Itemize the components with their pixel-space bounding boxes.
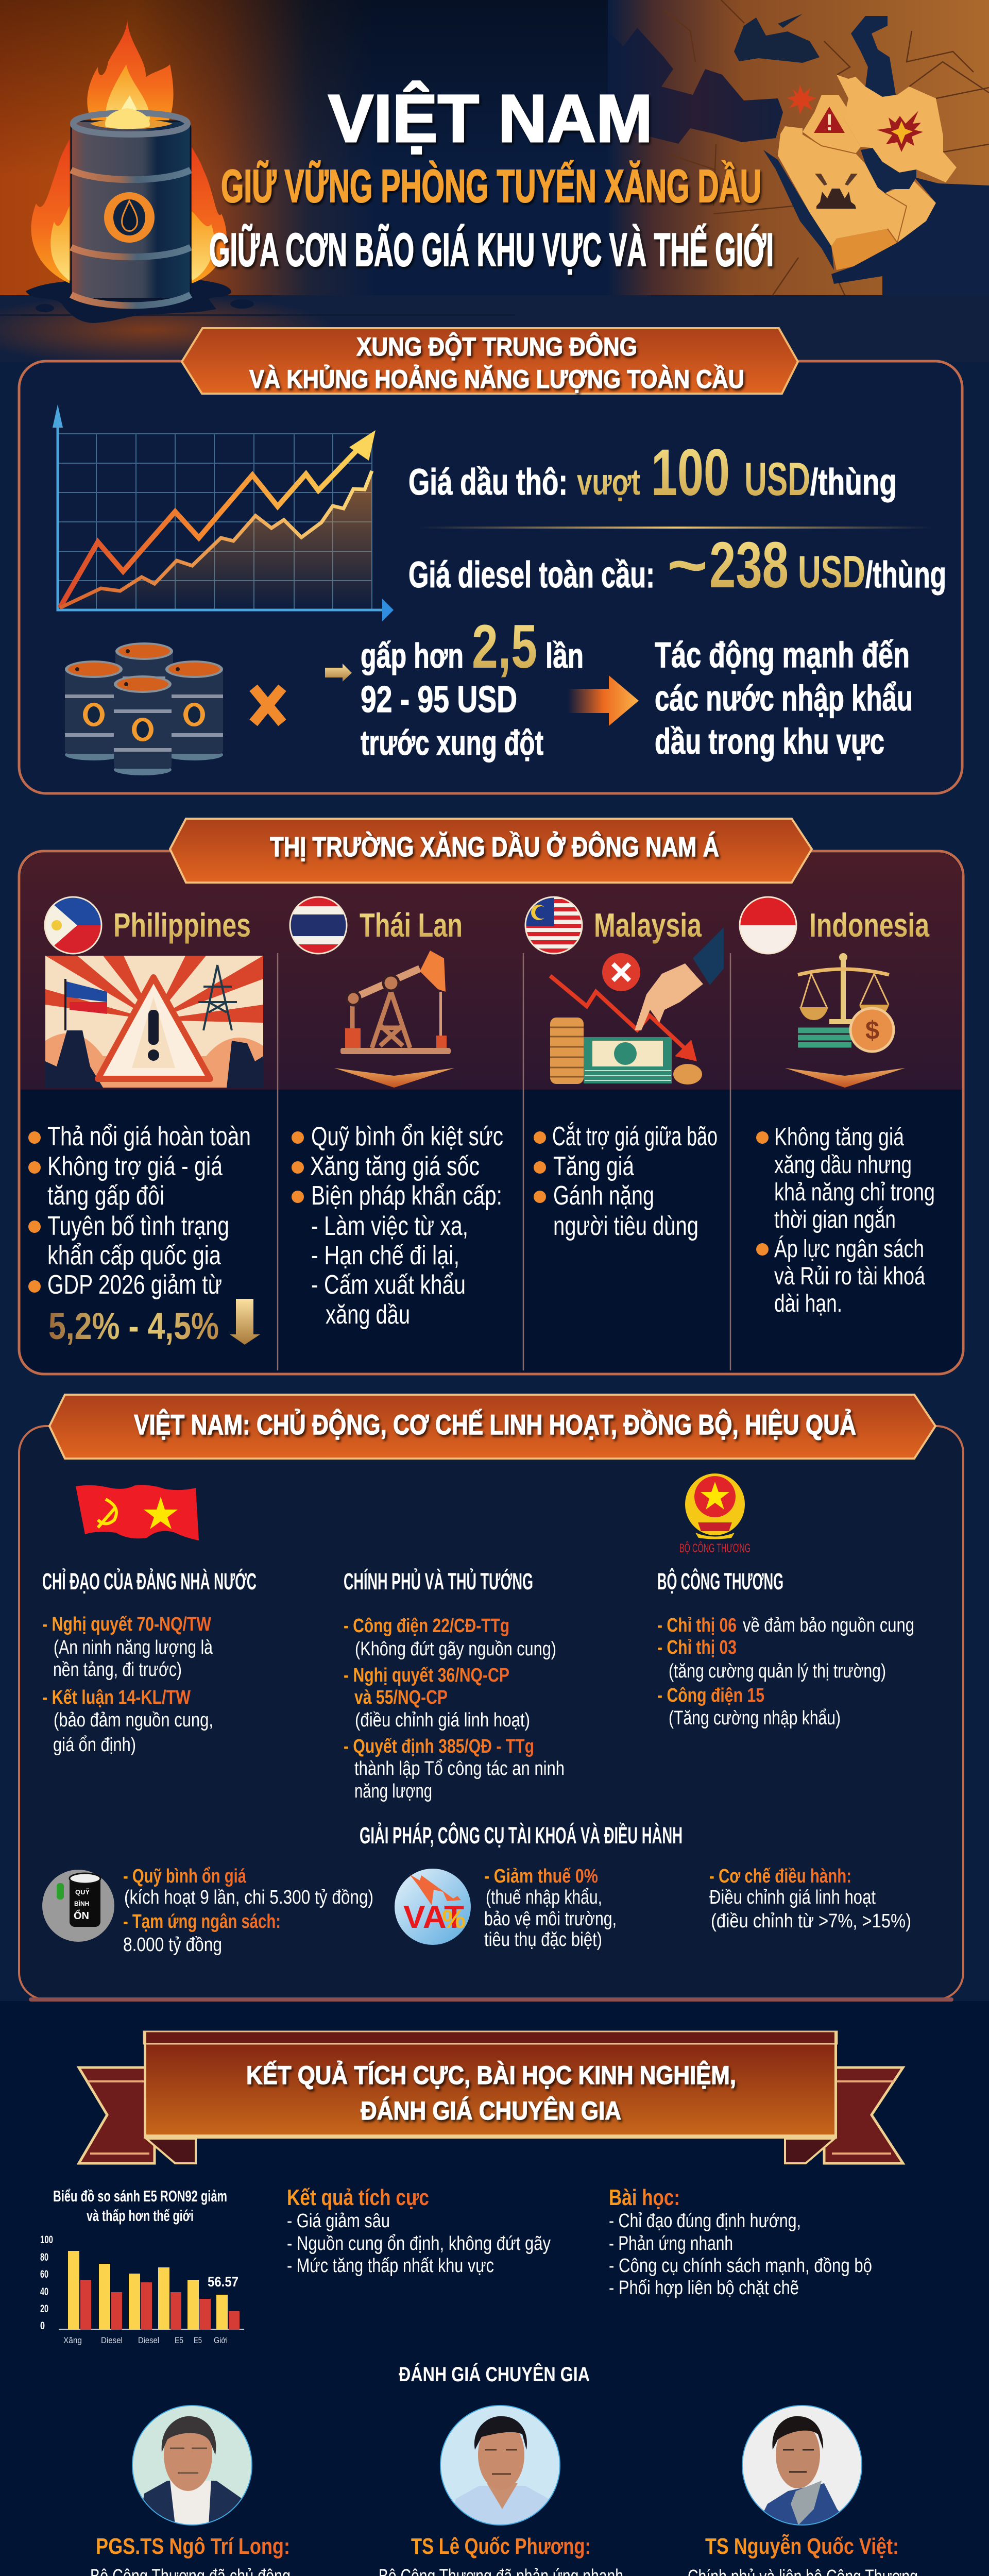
column: party direction: (bảo đảm nguồn cung, [54, 1709, 213, 1731]
bullet list: Thailand [292, 1122, 503, 1330]
column: Philippines [28, 897, 263, 1347]
text block: positive results: Kết quả tích cực [287, 2185, 429, 2210]
bullet list: Philippines: Thả nổi giá hoàn toàn [47, 1122, 251, 1151]
icon: burning oil barrel [26, 20, 254, 323]
bars [68, 2251, 240, 2330]
column: government: thành lập Tổ công tác an ninh [354, 1758, 565, 1780]
flag: Philippines [45, 897, 101, 954]
y axis labels: 20 [40, 2303, 48, 2315]
column: government: (điều chỉnh giá linh hoạt) [355, 1709, 530, 1731]
title line 1: VIỆT NAM [328, 80, 653, 156]
diesel price stat: ~ [667, 529, 708, 601]
tax text [484, 1866, 617, 1951]
crude oil price stat: Giá dầu thô: [408, 462, 568, 503]
icon: chevron [785, 1068, 905, 1088]
portrait [132, 2405, 252, 2525]
column: ministry of industry and trade: - Chỉ thị 06 [657, 1615, 737, 1636]
column: Philippines: Philippines [113, 906, 251, 944]
column: government: (Không đứt gãy nguồn cung) [355, 1638, 556, 1660]
column: government: CHÍNH PHỦ VÀ THỦ TƯỚNG [344, 1568, 533, 1595]
column: party direction [42, 1568, 257, 1756]
icon: large explosion [877, 111, 923, 152]
tax text: - Giảm thuế 0% [484, 1866, 598, 1887]
column: ministry of industry and trade: - Chỉ thị 03 [657, 1637, 737, 1658]
icon: stabilization fund: BÌNH [74, 1900, 89, 1907]
illustration: subsidy cut [550, 927, 724, 1084]
y axis labels: 100 [40, 2234, 53, 2246]
data label: 56.57 [208, 2274, 238, 2290]
expert: Ngô Trí Long [91, 2405, 289, 2576]
y axis labels: 0 [40, 2320, 45, 2332]
mechanism text: Điều chỉnh giá linh hoạt [709, 1887, 876, 1908]
tax text: tiêu thụ đặc biệt) [484, 1929, 602, 1951]
column: party direction: CHỈ ĐẠO CỦA ĐẢNG NHÀ NƯỚC [42, 1568, 257, 1595]
diesel price stat: Giá diesel toàn cầu: [408, 555, 655, 596]
x axis labels: Xăng [63, 2335, 82, 2345]
subheading: fiscal tools: GIẢI PHÁP, CÔNG CỤ TÀI KHOÁ VÀ ĐIỀU HÀNH [360, 1822, 683, 1849]
banner: section 1 heading: XUNG ĐỘT TRUNG ĐÔNG [356, 332, 637, 361]
column: party direction: nền tảng, đi trước) [53, 1659, 182, 1681]
bullet list: Malaysia [534, 1122, 718, 1241]
impact text: Tác động mạnh đến [655, 635, 910, 675]
diesel price stat: /thùng [865, 555, 946, 596]
bullet list: Thailand: Xăng tăng giá sốc [310, 1151, 480, 1181]
column: government: - Nghị quyết 36/NQ-CP [344, 1665, 509, 1686]
y axis labels: 80 [40, 2251, 48, 2263]
comparison text: lần [545, 636, 584, 675]
bullet list: Indonesia: Áp lực ngân sách [774, 1235, 924, 1263]
header illustration background [0, 0, 989, 366]
impact text [655, 635, 913, 761]
bullet list: Philippines [28, 1122, 260, 1347]
side flames [31, 139, 70, 283]
tax text: bảo vệ môi trường, [484, 1908, 617, 1930]
fund text: - Tạm ứng ngân sách: [123, 1911, 281, 1933]
bullet list: Thailand: Quỹ bình ổn kiệt sức [311, 1122, 503, 1151]
diesel price stat [408, 529, 946, 601]
crude oil price stat: vượt [577, 462, 640, 503]
tax text: (thuế nhập khẩu, [486, 1887, 602, 1908]
illustration: emergency warning [45, 956, 263, 1088]
crude oil price stat: /thùng [810, 462, 897, 503]
bullet list: Indonesia: thời gian ngắn [774, 1206, 896, 1233]
fund text: - Quỹ bình ổn giá [123, 1866, 247, 1887]
icon: multiply sign [253, 688, 282, 723]
text block: lessons: - Phản ứng nhanh [609, 2233, 733, 2255]
x axis labels: Giới [214, 2335, 228, 2345]
mechanism text: - Cơ chế điều hành: [709, 1866, 851, 1887]
title [209, 80, 774, 276]
column: party direction: - Nghị quyết 70-NQ/TW [42, 1614, 211, 1635]
icon: party flag [76, 1485, 199, 1540]
bullet list: Malaysia: Tăng giá [553, 1151, 634, 1181]
oil puddle [26, 278, 231, 323]
barrel bands [71, 170, 191, 306]
heading: expert assessment: ĐÁNH GIÁ CHUYÊN GIA [399, 2362, 590, 2386]
bullet list: Indonesia: khả năng chỉ trong [774, 1179, 935, 1206]
chart title: Biểu đồ so sánh E5 RON92 giảm [53, 2187, 227, 2205]
column: party direction: (An ninh năng lượng là [54, 1637, 213, 1658]
flag: Thailand [290, 897, 347, 954]
crude oil price stat: 100 [651, 436, 730, 510]
mechanism text [709, 1866, 911, 1932]
panel: Vietnam response [19, 1395, 963, 1999]
column: Indonesia [740, 897, 935, 1317]
bullet list: Malaysia: Gánh nặng [553, 1181, 654, 1211]
y axis labels: 40 [40, 2286, 48, 2298]
banner: section 2 heading: THỊ TRƯỜNG XĂNG DẦU Ở ĐÔNG NAM Á [270, 831, 719, 862]
text block: lessons: Bài học: [609, 2185, 680, 2210]
y axis labels [40, 2234, 53, 2332]
column: government: năng lượng [354, 1781, 432, 1802]
portrait [440, 2405, 560, 2525]
bullet list: Malaysia: người tiêu dùng [553, 1211, 698, 1241]
x axis labels: Diesel [101, 2335, 123, 2345]
bullet list: Thailand: - Hạn chế đi lại, [311, 1241, 459, 1270]
fund text: 8.000 tỷ đồng [123, 1934, 222, 1956]
central flame [87, 20, 174, 129]
column: ministry of industry and trade: về đảm bảo nguồn cung [743, 1615, 914, 1636]
text block: lessons: - Chỉ đạo đúng định hướng, [609, 2210, 801, 2232]
text block: lessons: - Phối hợp liên bộ chặt chẽ [609, 2277, 799, 2299]
crude oil price stat: USD [744, 453, 810, 505]
text block: lessons [609, 2185, 872, 2299]
panel: Middle East conflict [19, 328, 962, 793]
bullet list: Philippines: khẩn cấp quốc gia [47, 1241, 221, 1270]
icon: national emblem and ministry name [679, 1473, 751, 1555]
flag: Indonesia [740, 897, 796, 954]
column: government [344, 1568, 565, 1802]
x axis labels: E5 [175, 2335, 183, 2345]
bullet list: Indonesia: Không tăng giá [774, 1124, 904, 1151]
text block: positive results: - Giá giảm sâu [287, 2210, 390, 2232]
impact text: dầu trong khu vực [655, 721, 884, 761]
bullet list: Thailand: - Cấm xuất khẩu [311, 1270, 466, 1300]
barrel body [71, 121, 191, 299]
icon: VAT reduction: VAT [403, 1900, 464, 1935]
bullet list: Philippines: Tuyên bố tình trạng [47, 1211, 229, 1241]
bullet list: Malaysia: Cắt trợ giá giữa bão [552, 1122, 718, 1151]
y axis labels: 60 [40, 2268, 48, 2280]
icon: balance scale and coin: $ [865, 1016, 879, 1045]
bullet list: Indonesia: và Rủi ro tài khoá [774, 1263, 925, 1290]
icon: warning triangle [814, 107, 845, 133]
comparison text: 2,5 [472, 612, 537, 681]
chart title [53, 2187, 227, 2225]
x axis labels [63, 2335, 228, 2345]
banner: section 1 heading: VÀ KHỦNG HOẢNG NĂNG LƯỢNG TOÀN CẦU [249, 364, 744, 394]
bullet list: Thailand: xăng dầu [326, 1300, 410, 1330]
bar chart: E5 RON92 comparison [40, 2187, 244, 2345]
map of the Middle East [608, 0, 989, 296]
column: Malaysia [525, 897, 724, 1241]
fund text [123, 1866, 373, 1956]
banner: section 3 heading [49, 1395, 935, 1459]
column: government: - Quyết định 385/QĐ - TTg [344, 1736, 534, 1757]
icon: stabilization fund [42, 1870, 114, 1942]
flag: Malaysia [525, 897, 582, 954]
column: ministry of industry and trade: - Công điện 15 [657, 1685, 764, 1706]
ribbon banner: results and lessons: ĐÁNH GIÁ CHUYÊN GIA [361, 2096, 621, 2125]
expert: Nguyễn Quốc Việt: TS Nguyễn Quốc Việt: [705, 2533, 899, 2559]
icon: small explosion [787, 85, 816, 114]
expert: Ngô Trí Long: PGS.TS Ngô Trí Long: [96, 2534, 290, 2559]
barrel rim [73, 113, 187, 134]
panel: Southeast Asia fuel market [19, 819, 963, 1374]
column: government: và 55/NQ-CP [354, 1687, 448, 1708]
expert: Lê Quốc Phương: TS Lê Quốc Phương: [411, 2534, 591, 2559]
column: party direction: giá ổn định) [53, 1734, 136, 1756]
column: ministry of industry and trade: (Tăng cường nhập khẩu) [669, 1707, 841, 1729]
x axis labels: Diesel [138, 2335, 159, 2345]
banner: section 1 heading [182, 328, 798, 394]
icon: national emblem and ministry name: BỘ CÔNG THƯƠNG [679, 1541, 751, 1555]
expert: Lê Quốc Phương [379, 2405, 623, 2576]
icon: damaged oil facility [815, 174, 858, 209]
crude oil price stat [408, 436, 897, 510]
line chart: rising oil prices [53, 404, 394, 621]
text block: lessons: - Công cụ chính sách mạnh, đồng bộ [609, 2255, 872, 2277]
oil drop emblem [104, 192, 155, 243]
portrait [742, 2405, 862, 2525]
bullet list: Thailand: - Làm việc từ xa, [311, 1211, 468, 1241]
icon: VAT reduction: % [442, 1905, 466, 1934]
icon: balance scale and coin [798, 953, 894, 1052]
bullet list: Philippines: Không trợ giá - giá [47, 1151, 223, 1181]
text block: positive results: - Mức tăng thấp nhất khu vực [287, 2255, 494, 2277]
banner: section 2 heading [170, 819, 812, 883]
icon: stabilization fund: QUỸ [75, 1888, 90, 1896]
bullet list: Philippines: 5,2% - 4,5% [48, 1306, 219, 1347]
column: Thailand [290, 897, 503, 1330]
icon: stabilization fund: ỔN [74, 1909, 89, 1922]
chart title: và thấp hơn thế giới [87, 2207, 194, 2225]
column: government: - Công điện 22/CĐ-TTg [344, 1615, 509, 1637]
bullet list: Indonesia: xăng dầu nhưng [774, 1151, 912, 1179]
icon: VAT reduction [395, 1869, 471, 1945]
bullet list: Philippines: GDP 2026 giảm từ [47, 1270, 222, 1300]
bullet list: Indonesia: dài hạn. [774, 1290, 842, 1317]
fund text: (kích hoạt 9 lần, chi 5.300 tỷ đồng) [124, 1887, 373, 1908]
icon: oil pumpjack [340, 951, 451, 1054]
mechanism text: (điều chỉnh từ >7%, >15%) [711, 1910, 911, 1932]
column: ministry of industry and trade: (tăng cường quản lý thị trường) [669, 1660, 886, 1682]
column: ministry of industry and trade [657, 1568, 914, 1729]
column: Indonesia: Indonesia [809, 906, 930, 944]
bullet list: Thailand: Biện pháp khẩn cấp: [311, 1181, 502, 1211]
comparison text: trước xung đột [361, 723, 543, 762]
text block: positive results [287, 2185, 551, 2277]
diesel price stat: USD [798, 546, 865, 597]
ribbon banner: results and lessons [79, 2031, 903, 2163]
bullet list: Indonesia [756, 1124, 935, 1317]
column: Thailand: Thái Lan [360, 906, 463, 944]
comparison text: gấp hơn [361, 636, 464, 675]
x axis labels: E5 [194, 2335, 202, 2345]
expert: Nguyễn Quốc Việt [688, 2405, 918, 2576]
diesel price stat: 238 [709, 529, 789, 601]
icon: chevron [334, 1068, 454, 1088]
bullet list: Philippines: tăng gấp đôi [47, 1181, 164, 1211]
column: party direction: - Kết luận 14-KL/TW [42, 1687, 191, 1708]
arrow: impact [568, 675, 639, 726]
ribbon banner: results and lessons: KẾT QUẢ TÍCH CỰC, BÀI HỌC KINH NGHIỆM, [246, 2061, 736, 2090]
text block: positive results: - Nguồn cung ổn định, không đứt gãy [287, 2233, 551, 2255]
icon: group of oil barrels [65, 642, 223, 775]
comparison text: 92 - 95 USD [361, 679, 517, 720]
column: ministry of industry and trade: BỘ CÔNG THƯƠNG [657, 1568, 783, 1595]
comparison text [361, 612, 584, 762]
column: Malaysia: Malaysia [594, 906, 702, 944]
icon: small arrow [325, 664, 352, 682]
